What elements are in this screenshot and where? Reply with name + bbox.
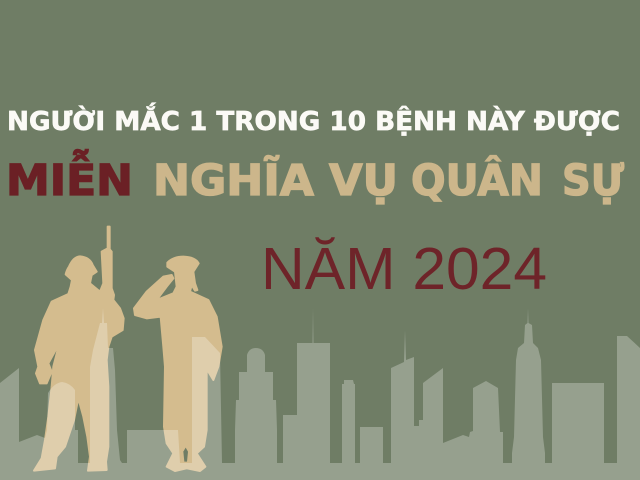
title line 1: NGƯỜI MẮC 1 TRONG 10 BỆNH NÀY ĐƯỢC bbox=[7, 101, 620, 137]
city skyline bbox=[0, 308, 640, 480]
year heading: NĂM 2024 bbox=[261, 236, 547, 302]
title line 2: NGHĨA bbox=[153, 155, 315, 206]
icon: soldier with rifle silhouette bbox=[34, 227, 124, 471]
title line 2 bbox=[6, 149, 624, 206]
icon: saluting officer silhouette bbox=[134, 257, 222, 471]
title line 2: VỤ bbox=[329, 156, 398, 206]
title line 2: SỰ bbox=[562, 156, 624, 206]
title line 2: MIỄN bbox=[6, 149, 133, 206]
title line 2: QUÂN bbox=[411, 155, 543, 206]
